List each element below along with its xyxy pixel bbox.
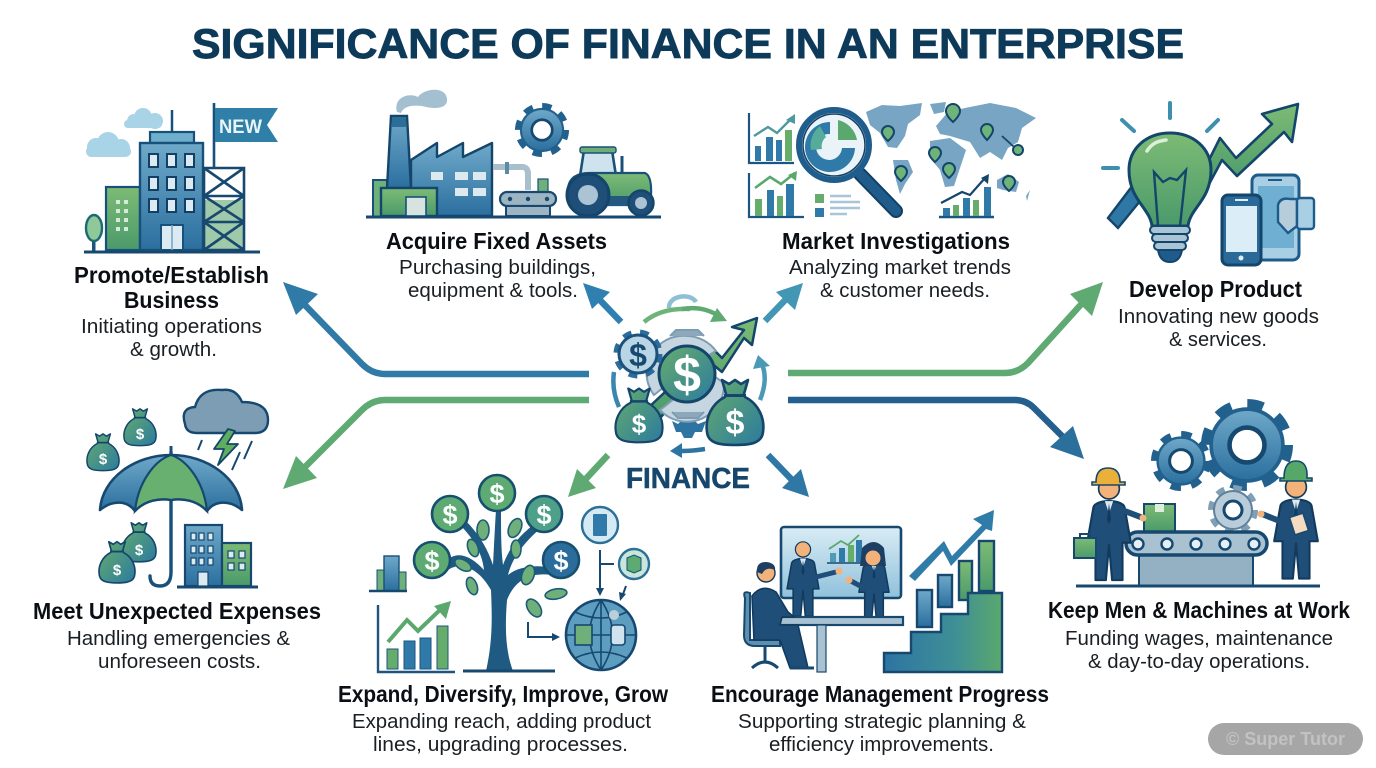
icon: building with new flag: [84, 103, 278, 252]
description: [399, 256, 596, 302]
icon: world map with pins: [866, 102, 1036, 201]
arrow: to develop product: [788, 282, 1103, 373]
icon: money tree: $: [489, 479, 505, 509]
title: SIGNIFICANCE OF FINANCE IN AN ENTERPRISE: [192, 20, 1184, 67]
icon: rising arrow: [648, 318, 757, 418]
description: unforeseen costs.: [98, 650, 261, 673]
icon: gears, workers and conveyor: [1074, 407, 1320, 586]
icon: left money bag: [615, 388, 663, 442]
heading: Develop Product: [1129, 276, 1302, 302]
heading: Promote/Establish: [74, 262, 269, 288]
panel: keep men and machines at work: [1048, 407, 1350, 673]
heading: [74, 262, 269, 313]
icon: money tree: $: [536, 500, 552, 530]
arrow: to fixed assets: [583, 283, 621, 322]
panel: encourage management progress: [711, 510, 1049, 756]
description: lines, upgrading processes.: [373, 733, 628, 756]
description: Initiating operations: [81, 315, 262, 338]
description: [81, 315, 262, 361]
icon: small bar charts: [749, 113, 860, 217]
panel: meet unexpected expenses: [33, 390, 321, 673]
icon: large gear with dollar: $: [673, 347, 701, 403]
heading: Keep Men & Machines at Work: [1048, 597, 1350, 623]
heading: Encourage Management Progress: [711, 681, 1049, 707]
description: Expanding reach, adding product: [352, 710, 651, 733]
panel: expand diversify improve grow: [338, 475, 668, 756]
heading: Acquire Fixed Assets: [386, 228, 607, 254]
icon: building with new flag: NEW: [219, 117, 262, 138]
arrow: to market investigations: [765, 283, 803, 321]
arrow: to promote business: [283, 282, 589, 374]
icon: light bulb, arrow, devices: [1103, 103, 1314, 265]
icon: small gear with dollar: $: [629, 337, 647, 373]
description: efficiency improvements.: [769, 733, 994, 756]
icon: money tree: $: [424, 546, 440, 576]
description: [789, 256, 1011, 302]
icon: money tree: [414, 475, 579, 671]
icon: bars with trend line: [939, 174, 994, 217]
icon: factory, gear and tractor: [366, 90, 661, 217]
icon: umbrella, storm and money bags: $: [136, 426, 145, 443]
description: [1065, 627, 1333, 673]
description: Analyzing market trends: [789, 256, 1011, 279]
icon: circular flow arcs: [613, 296, 770, 458]
arrows from finance: [283, 282, 1103, 497]
icon: right money bag: [707, 380, 763, 445]
icon: magnifier with pie chart: [799, 110, 896, 211]
icon: umbrella, storm and money bags: $: [113, 562, 122, 579]
label: finance: FINANCE: [626, 463, 750, 495]
panel: market investigations: [749, 102, 1036, 302]
icon: right money bag: $: [726, 404, 745, 442]
description: [738, 710, 1026, 756]
central finance hub: [613, 296, 770, 495]
heading: Business: [124, 287, 219, 313]
heading: Meet Unexpected Expenses: [33, 598, 321, 624]
heading: Market Investigations: [782, 228, 1010, 254]
description: Funding wages, maintenance: [1065, 627, 1333, 650]
arrow: to management progress: [768, 455, 809, 497]
icon: money tree: $: [553, 546, 569, 576]
arrow: to men and machines: [788, 400, 1084, 459]
icon: umbrella, storm and money bags: $: [99, 451, 108, 468]
icon: money tree: $: [442, 500, 458, 530]
icon: small gear with dollar: [618, 334, 658, 374]
icon: rising stairs and bars: [884, 510, 1002, 672]
description: Supporting strategic planning &: [738, 710, 1026, 733]
heading: Expand, Diversify, Improve, Grow: [338, 681, 668, 707]
arrow: to unexpected expenses: [283, 400, 589, 489]
description: [352, 710, 651, 756]
icon: building and growth chart: [369, 556, 455, 672]
panel: acquire fixed assets: [366, 90, 661, 302]
icon: large gear with dollar: [647, 330, 724, 422]
description: & customer needs.: [820, 279, 990, 302]
description: [67, 627, 290, 673]
icon: products and globe: [528, 507, 649, 670]
description: Innovating new goods: [1118, 305, 1319, 328]
icon: umbrella, storm and money bags: [87, 390, 268, 587]
icon: left money bag: $: [632, 409, 647, 439]
description: [1118, 305, 1319, 351]
arrow: to expand and grow: [568, 455, 608, 497]
description: & services.: [1169, 328, 1267, 351]
icon: umbrella, storm and money bags: $: [135, 542, 144, 559]
description: & growth.: [130, 338, 217, 361]
icon: meeting at whiteboard: [744, 527, 903, 672]
description: Purchasing buildings,: [399, 256, 596, 279]
panel: promote establish business: [74, 103, 278, 361]
watermark: [1208, 723, 1363, 755]
description: equipment & tools.: [408, 279, 578, 302]
description: Handling emergencies &: [67, 627, 290, 650]
watermark: © Super Tutor: [1226, 729, 1345, 749]
panel: develop product: [1103, 103, 1319, 351]
description: & day-to-day operations.: [1088, 650, 1310, 673]
